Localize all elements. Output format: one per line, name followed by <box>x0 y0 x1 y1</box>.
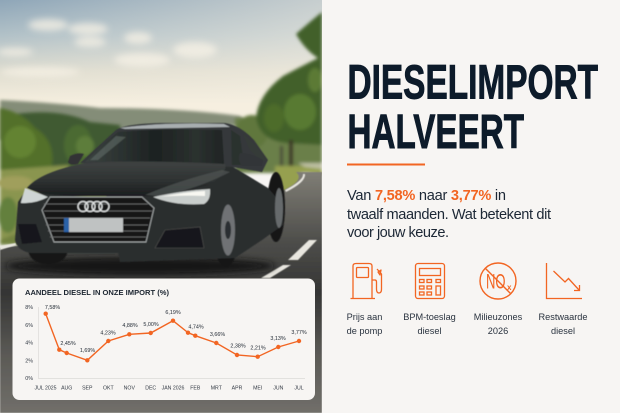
icon: falling value chart <box>546 263 582 298</box>
data line <box>44 312 301 362</box>
accent rule <box>347 164 425 166</box>
car body side <box>100 165 283 262</box>
intro text: twaalf maanden. Wat betekent dit <box>347 207 551 223</box>
intro text: voor jouw keuze. <box>347 225 449 241</box>
x axis labels: JUL <box>294 386 304 392</box>
distant hills <box>0 100 250 140</box>
tyres <box>28 252 68 263</box>
data labels: 4,74% <box>188 324 204 330</box>
label: low-emission zones: Milieuzones <box>474 312 522 322</box>
data labels: 4,88% <box>122 323 138 329</box>
x axis labels: MRT <box>211 386 223 392</box>
side windows <box>231 130 242 165</box>
left trees and verge <box>0 108 125 245</box>
data labels <box>45 305 307 354</box>
axes <box>38 307 305 378</box>
headlights <box>21 188 48 203</box>
label: pump price: de pomp <box>347 326 382 336</box>
car roof and pillars <box>80 123 268 172</box>
road markings <box>0 174 317 278</box>
four-ring badge <box>78 202 109 212</box>
car shadow <box>5 257 275 275</box>
sky with clouds <box>0 0 322 130</box>
data labels: 2,45% <box>60 341 76 347</box>
label: BPM surcharge: diesel <box>417 326 442 336</box>
data labels: 3,66% <box>210 332 225 338</box>
label: residual value: diesel <box>551 326 575 336</box>
data labels: 7,58% <box>45 305 60 311</box>
x axis labels: JUL 2025 <box>34 386 57 392</box>
x axis labels: FEB <box>190 386 201 392</box>
intro text <box>347 188 551 241</box>
icon: fuel pump <box>350 264 382 298</box>
right trees and verge <box>235 12 322 195</box>
title <box>348 56 598 159</box>
icon labels <box>347 312 588 336</box>
label: BPM surcharge: BPM-toeslag <box>403 312 456 322</box>
road <box>0 172 322 413</box>
title: HALVEERT <box>348 106 524 159</box>
label: pump price: Prijs aan <box>347 312 382 322</box>
y axis labels: 8% <box>25 305 33 311</box>
icon: NOx prohibited: NO <box>486 270 506 294</box>
chart card <box>12 278 315 400</box>
data labels: 3,77% <box>291 330 307 336</box>
x axis labels: APR <box>232 386 243 392</box>
x axis labels: SEP <box>82 386 93 392</box>
y axis labels: 6% <box>25 323 33 329</box>
x axis labels: JAN 2026 <box>162 386 184 392</box>
data labels: 2,38% <box>230 344 246 350</box>
photo: car on a country road <box>0 0 322 413</box>
y axis labels: 0% <box>25 376 33 382</box>
data labels: 5,00% <box>143 322 159 328</box>
data labels: 3,13% <box>270 336 286 342</box>
y axis labels: 4% <box>25 340 33 346</box>
intro text: Van 7,58% naar 3,77% in <box>347 188 506 204</box>
data labels: 1,69% <box>80 348 95 354</box>
grille <box>42 197 154 242</box>
y axis labels <box>25 305 33 382</box>
label: residual value: Restwaarde <box>538 312 588 322</box>
x axis labels: JUN <box>273 386 284 392</box>
side mirrors <box>68 153 84 165</box>
x axis labels <box>34 386 304 392</box>
label: low-emission zones: 2026 <box>488 326 508 336</box>
y axis labels: 2% <box>25 358 33 364</box>
x axis labels: MEI <box>253 386 262 392</box>
car <box>5 123 285 275</box>
x axis labels: DEC <box>145 386 156 392</box>
lower intakes <box>18 224 42 244</box>
data labels: 6,19% <box>165 310 181 316</box>
front wheel <box>220 204 236 256</box>
x axis labels: NOV <box>124 386 135 392</box>
rear wheel <box>275 188 283 228</box>
data labels: 4,23% <box>100 330 116 336</box>
icon: calculator <box>416 264 444 298</box>
windscreen <box>85 129 224 164</box>
front bumper <box>14 192 118 254</box>
chart title: AANDEEL DIESEL IN ONZE IMPORT (%) <box>25 288 170 297</box>
blurred licence plate <box>64 218 123 232</box>
x axis labels: OKT <box>103 386 114 392</box>
data labels: 2,21% <box>250 346 266 352</box>
x axis labels: AUG <box>61 386 72 392</box>
icon: NOx prohibited: x <box>507 283 512 292</box>
icon: NOx prohibited <box>480 263 516 299</box>
bonnet <box>27 162 225 196</box>
